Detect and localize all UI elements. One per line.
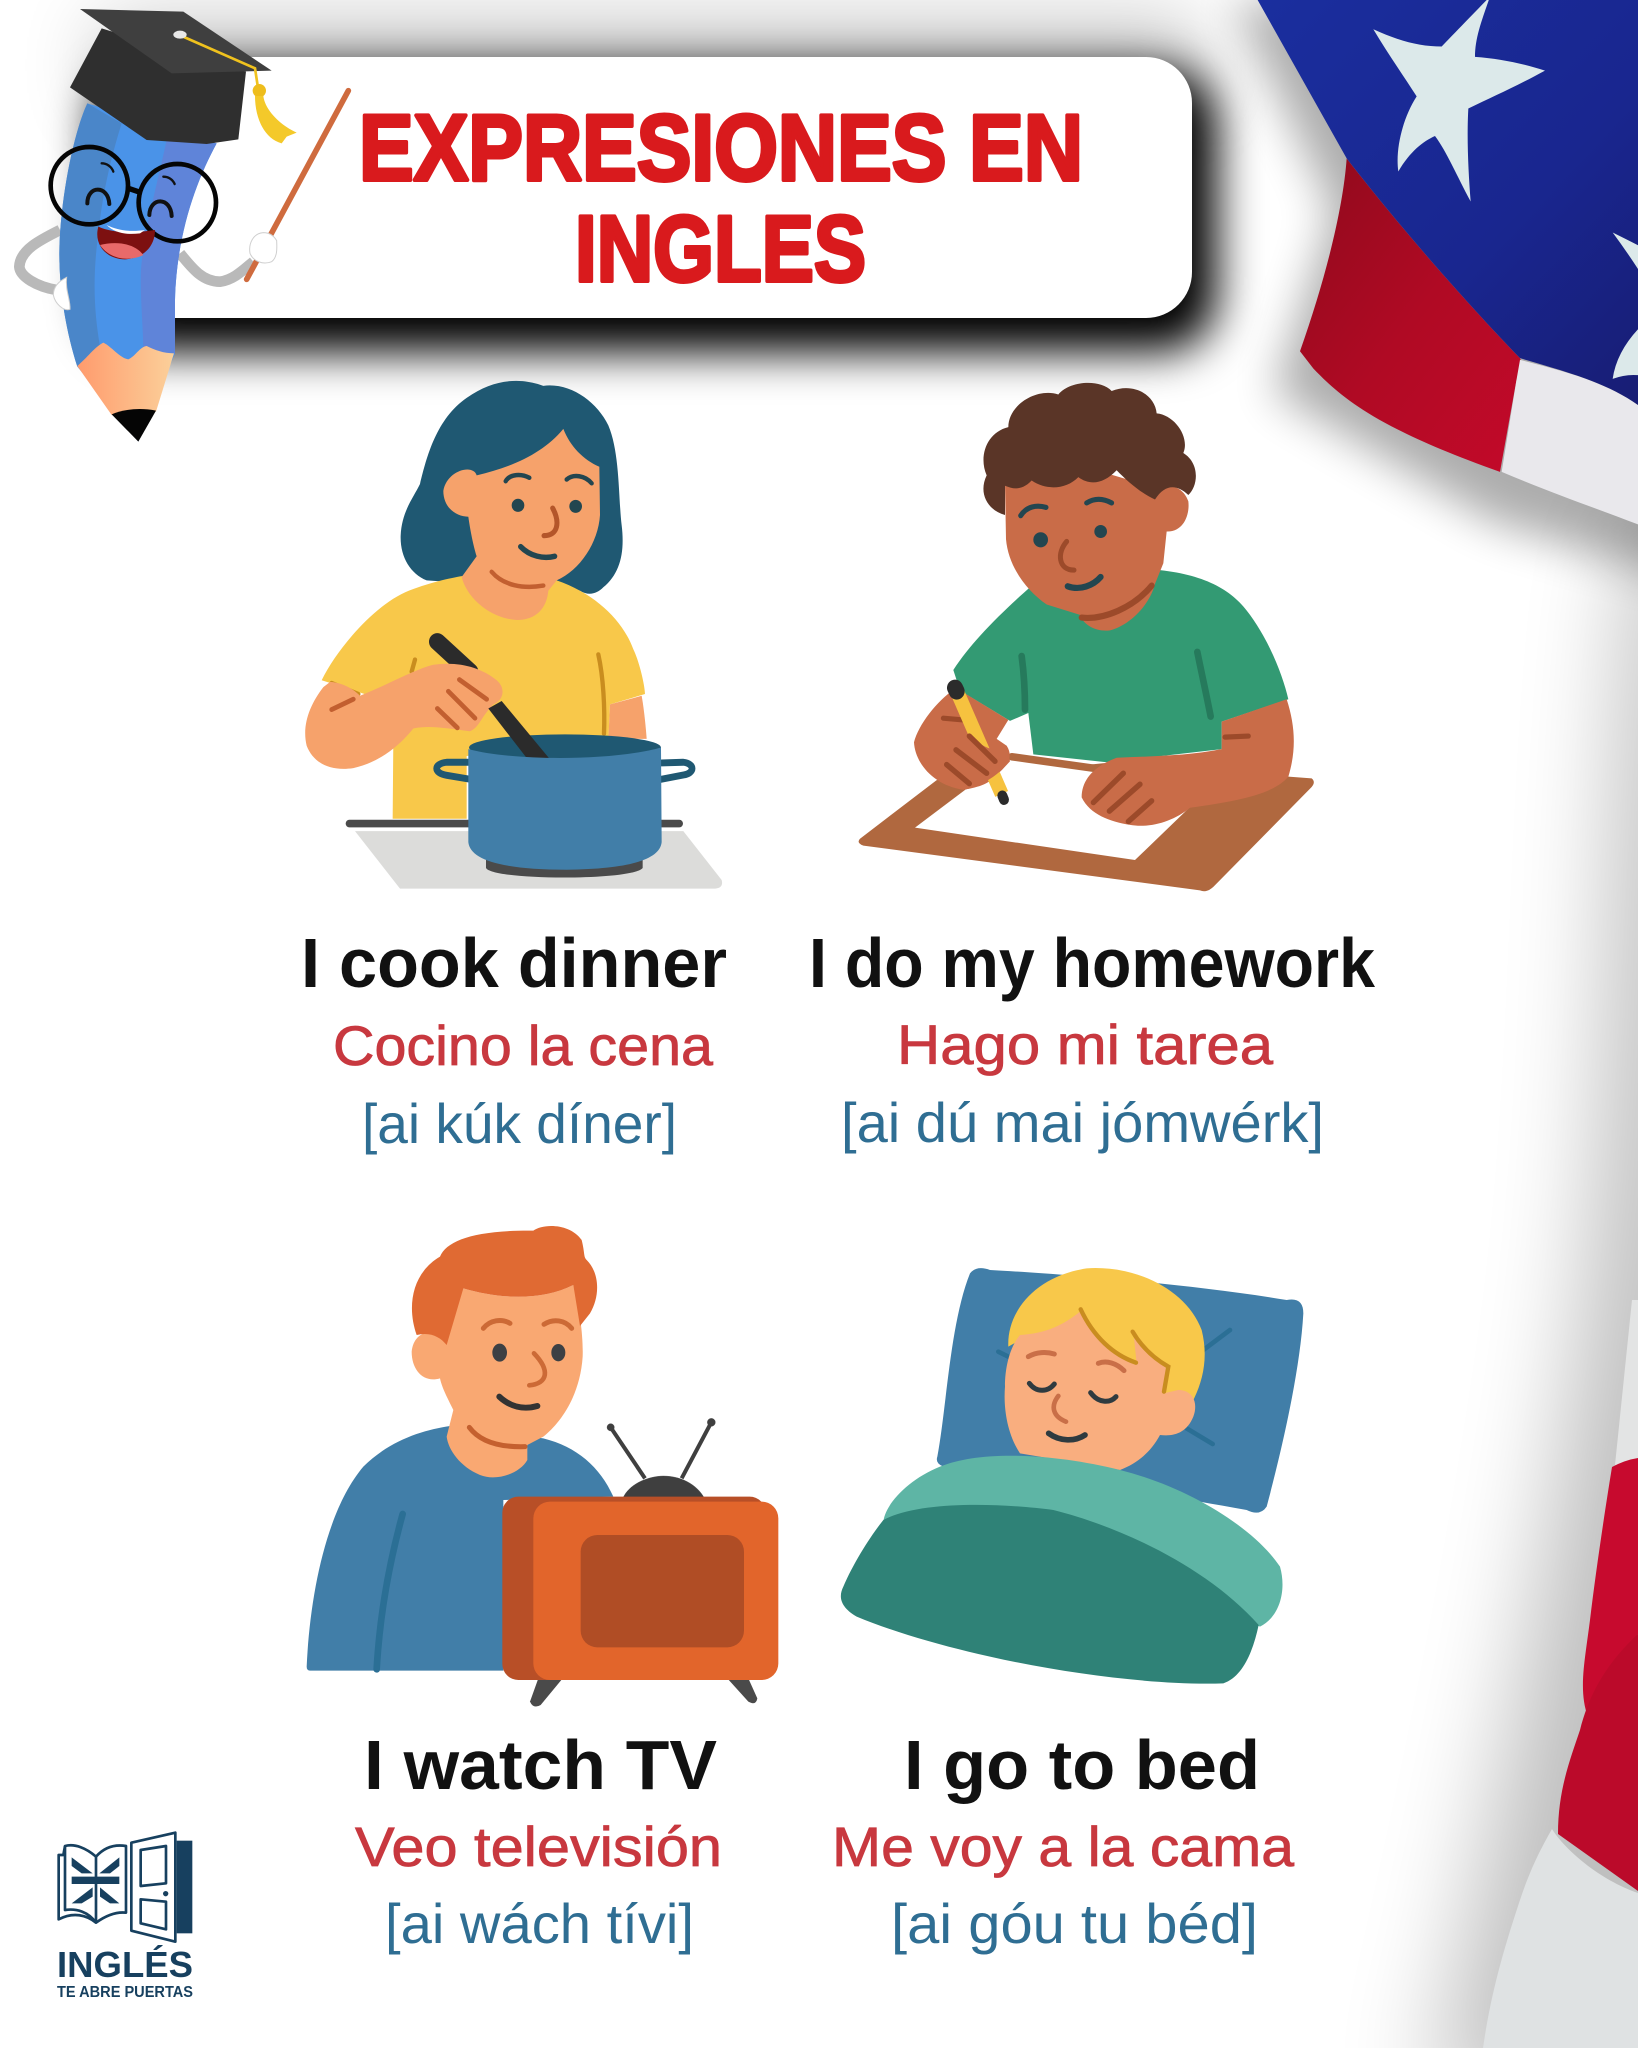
flag red stripe: [1300, 158, 1533, 472]
pot interior: [469, 734, 661, 761]
mouth: [97, 225, 155, 259]
arm right: [180, 253, 253, 282]
hair: [412, 1226, 597, 1345]
right arm: [608, 696, 647, 739]
blanket fold: [883, 1456, 1282, 1627]
hands: [53, 233, 277, 310]
flag: bottom right: [1483, 1300, 1638, 2048]
caption: I do my homework: [809, 924, 1375, 1154]
spoon handle top: [437, 642, 470, 672]
banner shadow: [95, 20, 1217, 352]
features: [469, 1321, 572, 1447]
sweater: [307, 1426, 613, 1671]
caption: I watch TV: [ai wách tívi]: [385, 1892, 694, 1955]
counter: [355, 831, 722, 889]
paper: [915, 756, 1190, 860]
flag white stripe: [1502, 360, 1638, 525]
flag stars: [1373, 0, 1638, 379]
pillow creases: [998, 1330, 1230, 1444]
tv screen: [581, 1535, 744, 1647]
caption: I go to bed: I go to bed: [904, 1726, 1260, 1804]
cap body: [70, 28, 246, 144]
shirt: [322, 575, 645, 819]
pot handles: [437, 762, 692, 779]
caption: I watch TV: I watch TV: [364, 1726, 717, 1804]
caption: I cook dinner: [301, 924, 727, 1155]
pencil body: [59, 103, 217, 442]
red folds: [1583, 1458, 1638, 1717]
spoon lower: [488, 701, 551, 760]
arm and hand: [305, 664, 503, 769]
lower white fold: [1483, 1829, 1638, 2048]
caption: I do my homework: [ai dú mai jómwérk]: [841, 1091, 1324, 1154]
caption: I do my homework: Hago mi tarea: [897, 1013, 1274, 1076]
logo icon: book and door: [59, 1833, 192, 1942]
tassel: [173, 31, 297, 143]
glasses: [51, 147, 216, 241]
hand lines: [332, 680, 487, 728]
logo: ingles te abre puertas: [57, 1833, 193, 2001]
face: [1005, 1312, 1195, 1470]
caption: I watch TV: [355, 1726, 722, 1955]
stove line: [349, 813, 679, 835]
hair: [401, 381, 623, 594]
pointer stick: [247, 91, 348, 279]
caption: I go to bed: [ai góu tu béd]: [891, 1892, 1258, 1955]
facial features: [332, 475, 604, 734]
caption: I go to bed: [832, 1726, 1295, 1955]
caption: I cook dinner: Cocino la cena: [333, 1014, 714, 1077]
desk: [859, 763, 1314, 891]
caption: I do my homework: I do my homework: [809, 924, 1375, 1002]
right arm and hand: [1082, 699, 1294, 826]
face: [412, 1285, 583, 1477]
tv antennas: [607, 1418, 715, 1502]
illustration: boy in bed: [841, 1268, 1303, 1684]
pencil lead: [112, 409, 156, 442]
pencil tip: [77, 343, 174, 415]
pot body: [468, 747, 662, 870]
caption: I cook dinner: [ai kúk díner]: [362, 1092, 677, 1155]
logo: ingles te abre puertas: INGLÉS: [57, 1944, 193, 1985]
flag blue canton: [1257, 0, 1638, 406]
caption: I go to bed: Me voy a la cama: [832, 1815, 1295, 1878]
eyes: [87, 163, 175, 216]
blanket: [841, 1505, 1259, 1684]
soft flag shadows on the page background: [1234, 2, 1638, 2048]
hair: [983, 383, 1196, 515]
cap top: [80, 9, 272, 73]
caption: I watch TV: Veo televisión: [355, 1815, 722, 1878]
shirt: [953, 570, 1288, 762]
title: [359, 95, 1083, 301]
shirt creases: [1022, 652, 1211, 716]
tv front: [533, 1502, 778, 1680]
tv back: [502, 1497, 766, 1680]
hair lines and features: [1028, 1309, 1168, 1440]
burner: [486, 859, 643, 878]
caption: I cook dinner: I cook dinner: [301, 924, 727, 1002]
logo: ingles te abre puertas: TE ABRE PUERTAS: [57, 1984, 193, 2001]
face and neck: [443, 429, 600, 620]
title: EXPRESIONES EN: [359, 95, 1083, 200]
flag: top right: [1257, 0, 1638, 525]
mascot: pencil with graduation cap: [19, 9, 348, 442]
yellow pencil: [957, 691, 1002, 794]
upper white fold: [1615, 1300, 1638, 1465]
hair: [1008, 1268, 1205, 1400]
pillow: [937, 1268, 1303, 1513]
facial features: [943, 499, 1248, 737]
left arm and hand: [914, 689, 1010, 790]
banner panel: [100, 57, 1192, 318]
tv legs: [530, 1678, 563, 1707]
arm left: [19, 230, 60, 290]
title: INGLES: [575, 196, 866, 301]
illustration: woman cooking: [305, 381, 722, 889]
desk edge: [1012, 757, 1100, 769]
fingers: [923, 737, 1010, 790]
illustration: boy doing homework: [859, 383, 1314, 891]
illustration: man watching tv: [307, 1226, 778, 1707]
head: [1005, 463, 1189, 631]
